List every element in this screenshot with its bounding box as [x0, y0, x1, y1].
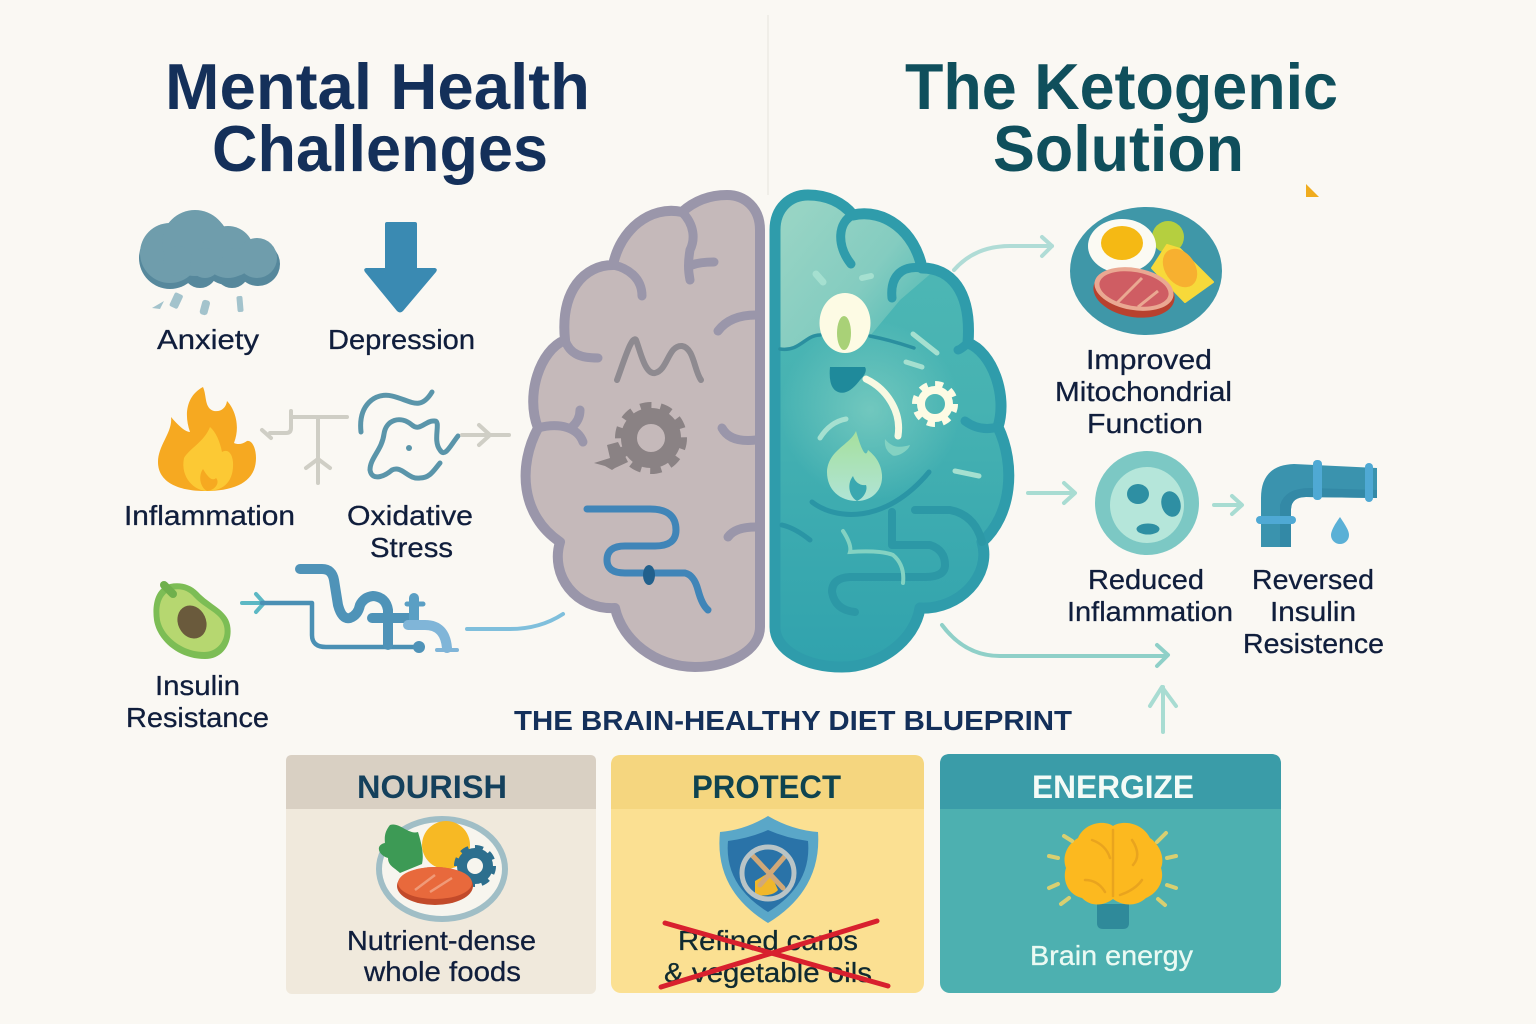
- label: Reversed Insulin Resistence: Insulin: [1270, 596, 1356, 627]
- label: Reversed Insulin Resistence: [1243, 564, 1384, 659]
- title: The Ketogenic Solution: Solution: [993, 112, 1244, 185]
- text: nutrient-dense whole foods: whole foods: [363, 956, 521, 987]
- icon: glowing golden brain: [1049, 823, 1176, 929]
- text: nutrient-dense whole foods: Nutrient-dense: [347, 925, 536, 956]
- label: Improved Mitochondrial Function: Improved: [1086, 344, 1212, 375]
- label: Insulin Resistance: [126, 670, 269, 733]
- heading: NOURISH: NOURISH: [357, 769, 507, 805]
- text: refined carbs and vegetable oils: & vegetable oils: [664, 957, 872, 988]
- icon: rain cloud: [139, 210, 280, 316]
- arrow: energize up: [1150, 687, 1176, 732]
- label: Oxidative Stress: Oxidative: [347, 500, 473, 531]
- title: The Ketogenic Solution: [905, 50, 1338, 185]
- title: The Ketogenic Solution: The Ketogenic: [905, 50, 1338, 123]
- text: refined carbs and vegetable oils: Refined carbs: [678, 925, 858, 956]
- illustration: grey left brain: [526, 195, 760, 667]
- title: Mental Health Challenges: Challenges: [212, 112, 548, 185]
- icon: repaired pipe with drop: [1256, 460, 1377, 547]
- label: Reduced Inflammation: [1067, 564, 1233, 627]
- arrow: brain down to blueprint: [942, 625, 1168, 666]
- icon: wavy line: [617, 339, 701, 380]
- label: Reduced Inflammation: Reduced: [1088, 564, 1204, 595]
- icon: green flame: [827, 431, 882, 501]
- icon: shield with crossed carbs: [719, 816, 818, 923]
- icon: light gut line: [843, 531, 903, 583]
- panel: protect: [611, 755, 924, 993]
- panel: the ketogenic solution: [905, 50, 1384, 732]
- label: Insulin Resistance: Resistance: [126, 702, 269, 733]
- panel: mental health challenges: [124, 50, 590, 733]
- icon: mitochondria shapes: [816, 274, 979, 476]
- arrow: grey branching connector: [262, 411, 347, 483]
- heading: The Brain-Healthy Diet Blueprint: THE BRAIN-HEALTHY DIET BLUEPRINT: [514, 705, 1072, 736]
- icon: broken gear: [594, 406, 683, 470]
- label: Reversed Insulin Resistence: Reversed: [1252, 564, 1374, 595]
- icon: flame: [158, 387, 256, 491]
- arrow: cell to pipe: [1214, 496, 1242, 514]
- panel: nourish: [286, 755, 596, 994]
- heading: PROTECT: PROTECT: [692, 769, 841, 805]
- icon: cell: [1095, 451, 1199, 555]
- icon: red cross-out: [661, 921, 888, 987]
- icon: tangled pipes: [242, 569, 457, 653]
- text: brain energy: Brain energy: [1030, 940, 1193, 971]
- panel: energize: [940, 754, 1281, 993]
- label: Improved Mitochondrial Function: [1055, 344, 1232, 439]
- label: Depression: Depression: [328, 324, 475, 355]
- label: Inflammation: Inflammation: [124, 500, 295, 531]
- label: Improved Mitochondrial Function: Mitochondrial: [1055, 376, 1232, 407]
- arrow: blue curve to brain: [467, 614, 563, 629]
- text: refined carbs and vegetable oils: [664, 925, 872, 988]
- heading: ENERGIZE: ENERGIZE: [1032, 769, 1194, 805]
- arrow: brain to cell: [1028, 483, 1075, 503]
- icon: down arrow: [364, 222, 437, 312]
- label: Anxiety: Anxiety: [157, 324, 259, 355]
- title: Mental Health Challenges: [165, 50, 590, 185]
- label: Improved Mitochondrial Function: Function: [1087, 408, 1203, 439]
- icon: food plate with gear: [379, 819, 505, 919]
- decorative yellow triangle marker: [1306, 184, 1319, 197]
- icon: avocado: [153, 583, 231, 659]
- label: Oxidative Stress: [347, 500, 473, 563]
- icon: blue pipe: [587, 509, 708, 610]
- icon: keto food plate: [1070, 207, 1222, 335]
- illustration: teal right brain: [770, 190, 1020, 670]
- arrow: brain to food: [954, 237, 1052, 270]
- label: Insulin Resistance: Insulin: [155, 670, 240, 701]
- icon: white gear: [915, 384, 955, 424]
- label: Reduced Inflammation: Inflammation: [1067, 596, 1233, 627]
- arrow: grey arrow to brain: [462, 425, 509, 445]
- title: Mental Health Challenges: Mental Health: [165, 50, 590, 123]
- icon: bulb glow circle with leaf: [820, 293, 870, 353]
- label: Oxidative Stress: Stress: [370, 532, 453, 563]
- label: Reversed Insulin Resistence: Resistence: [1243, 628, 1384, 659]
- text: nutrient-dense whole foods: [347, 925, 536, 987]
- icon: oxidative stress squiggle: [361, 392, 458, 478]
